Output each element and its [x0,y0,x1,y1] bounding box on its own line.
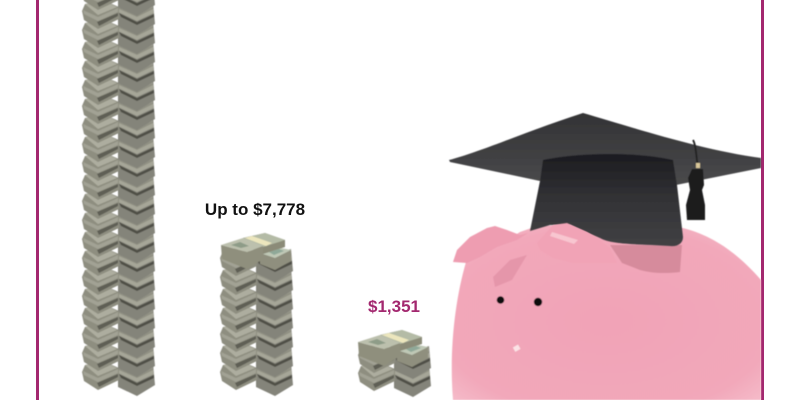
pig body [452,225,761,400]
label: $1,351: $1,351 [368,297,420,316]
medium money stack [220,233,293,396]
eyes [497,296,504,304]
cap reflection on pig [610,245,682,273]
tassel [686,140,705,220]
left border [36,0,39,400]
left ear shadow [493,255,527,287]
cap board [449,113,761,185]
right border [761,0,764,400]
tall money stack [82,0,155,396]
cap skull [530,154,683,246]
right ear over cap [537,223,617,263]
left ear [453,226,528,263]
piggy bank body [452,225,761,400]
small money stack [358,330,431,397]
graduation cap [449,113,761,246]
ear highlight [550,232,578,244]
label: up to $7,778: Up to $7,778 [205,200,305,219]
snout highlight [513,345,521,352]
